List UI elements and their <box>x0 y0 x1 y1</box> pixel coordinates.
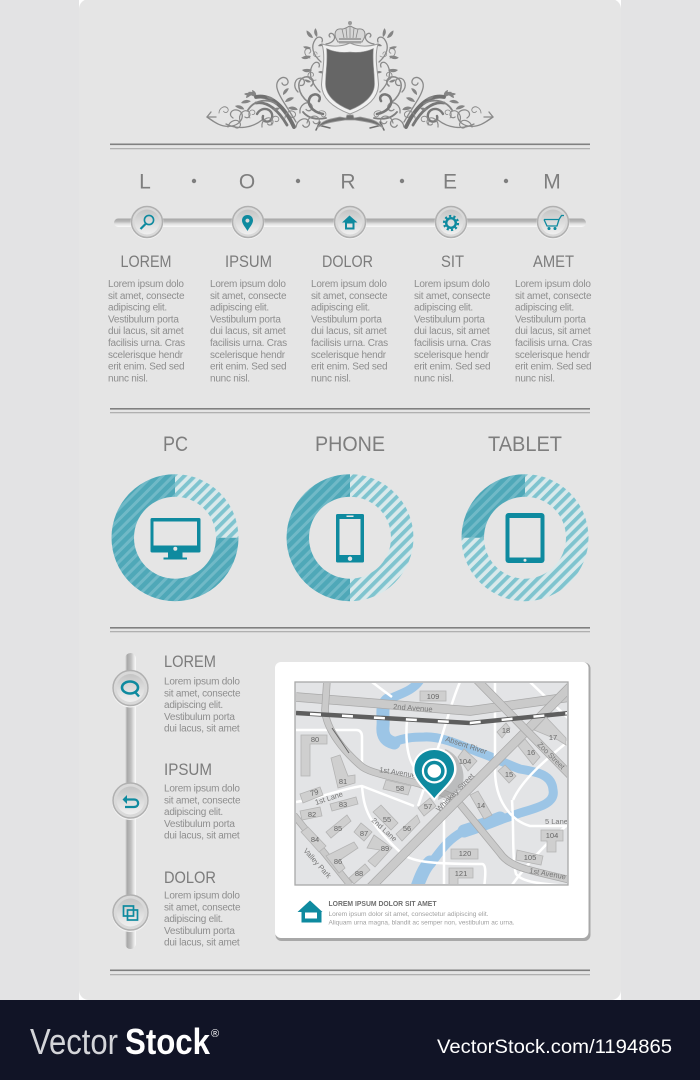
map card <box>275 662 590 941</box>
text column 3: nunc nisl. <box>311 373 351 384</box>
text column 2: Lorem ipsum dolo <box>210 279 286 290</box>
text column 4: Vestibulum porta <box>414 314 485 325</box>
donut chart: PC <box>111 474 238 601</box>
divider <box>110 144 590 149</box>
icon: pin <box>242 215 253 231</box>
column labels: SIT <box>441 253 464 271</box>
white streets <box>296 682 570 890</box>
text column 1: erit enim. Sed sed <box>108 362 184 373</box>
side item 2: dui lacus, sit amet <box>164 831 240 842</box>
donut chart: TABLET <box>462 474 588 601</box>
side item 3 <box>164 869 241 949</box>
side item 3: DOLOR <box>164 869 216 887</box>
map pin <box>412 748 464 801</box>
heading PC: PC <box>163 433 188 456</box>
button: layers <box>112 895 149 932</box>
side item 3: sit amet, consecte <box>164 902 241 913</box>
building numbers: 15 <box>505 770 513 779</box>
icon: magnifier <box>140 215 154 229</box>
text column 1: Vestibulum porta <box>108 314 179 325</box>
text column 1: nunc nisl. <box>108 373 148 384</box>
text column 4: nunc nisl. <box>414 373 454 384</box>
column labels: DOLOR <box>322 253 373 271</box>
street names: Valley Park <box>302 846 333 880</box>
building numbers: 57 <box>424 802 432 811</box>
text column 2: sit amet, consecte <box>210 291 287 302</box>
title letters L O R E M: L <box>139 170 151 194</box>
text column 2: scelerisque hendr <box>210 350 286 361</box>
street names: 1st Avenue <box>529 866 567 881</box>
text column 5: sit amet, consecte <box>515 291 592 302</box>
text column 2: erit enim. Sed sed <box>210 362 286 373</box>
building numbers: 105 <box>524 853 536 862</box>
text column 5: Vestibulum porta <box>515 314 586 325</box>
text column 1: facilisis urna. Cras <box>108 338 185 349</box>
street names: 5 Lane <box>545 817 568 826</box>
text column 4: sit amet, consecte <box>414 291 491 302</box>
building numbers: 79 <box>309 787 320 798</box>
vertical slider track <box>125 653 136 949</box>
building numbers: 14 <box>477 801 485 810</box>
icon: speech bubble <box>122 682 139 696</box>
side item 1 <box>164 653 241 735</box>
title letters L O R E M: M <box>543 170 561 194</box>
text column 3: adipiscing elit. <box>311 303 370 314</box>
footer url: VectorStock.com/1194865 <box>437 1036 672 1058</box>
side item 1: dui lacus, sit amet <box>164 724 240 735</box>
side item 2: adipiscing elit. <box>164 807 223 818</box>
building numbers: 121 <box>455 869 467 878</box>
street names: 1st Avenue <box>379 765 417 780</box>
side item 2: Lorem ipsum dolo <box>164 784 240 794</box>
icon: overlapping squares <box>124 906 138 920</box>
side item 3: Lorem ipsum dolo <box>164 890 240 902</box>
button: cart <box>536 206 570 239</box>
building numbers: 58 <box>396 784 404 793</box>
button: speech bubble <box>112 670 149 708</box>
text column 3: erit enim. Sed sed <box>311 362 387 373</box>
side item 3: dui lacus, sit amet <box>164 938 240 949</box>
text column 5: nunc nisl. <box>515 373 555 384</box>
legend text: Aliquam urna magna, blandit ac semper non, vestibulum ac urna. <box>328 920 515 926</box>
footer logo: Vector <box>30 1021 118 1062</box>
icon: back arrow <box>122 795 138 807</box>
button: gear <box>434 206 468 239</box>
building numbers: 84 <box>311 835 319 844</box>
column labels <box>120 253 574 271</box>
building numbers: 104 <box>459 757 471 766</box>
side item 3: Vestibulum porta <box>164 926 235 937</box>
button: search <box>130 206 164 239</box>
footer logo: Stock <box>125 1021 211 1062</box>
text column 4: dui lacus, sit amet <box>414 326 490 337</box>
white card corners behind panel <box>79 0 621 1000</box>
building numbers: 55 <box>383 815 391 824</box>
column labels: IPSUM <box>225 253 272 271</box>
side item 2: Vestibulum porta <box>164 819 235 830</box>
street names <box>302 702 568 881</box>
text column 1: scelerisque hendr <box>108 350 184 361</box>
text column 4: Lorem ipsum dolo <box>414 279 490 290</box>
icon: legend house <box>298 900 322 922</box>
heading PHONE: PHONE <box>315 433 385 456</box>
street names: 1st Lane <box>314 789 344 807</box>
text column 5: adipiscing elit. <box>515 303 574 314</box>
divider <box>110 408 590 413</box>
legend text: Lorem ipsum dolor sit amet, consectetur adipiscing elit. <box>328 911 489 918</box>
building numbers: 82 <box>308 810 316 819</box>
donut chart: PHONE <box>287 474 413 601</box>
icon: monitor <box>150 518 200 560</box>
shield <box>322 43 378 114</box>
building numbers: 89 <box>381 844 389 853</box>
title letters L O R E M <box>139 170 561 194</box>
horizontal slider track <box>114 218 586 227</box>
building numbers: 18 <box>502 726 510 735</box>
icon: phone <box>336 514 364 562</box>
side item 1: Vestibulum porta <box>164 712 235 723</box>
building numbers: 17 <box>549 733 557 742</box>
side item 1: Lorem ipsum dolo <box>164 676 240 688</box>
building numbers: 80 <box>311 735 319 744</box>
building numbers: 120 <box>459 849 471 858</box>
building numbers: 104 <box>546 831 558 840</box>
text column 4: scelerisque hendr <box>414 350 490 361</box>
title letters L O R E M: E <box>443 170 457 194</box>
side item 2: sit amet, consecte <box>164 795 241 806</box>
footer logo: ® <box>211 1028 219 1040</box>
side item 2 <box>164 761 241 842</box>
building numbers <box>308 692 558 878</box>
building numbers: 109 <box>427 692 439 701</box>
text column 2: dui lacus, sit amet <box>210 326 286 337</box>
ribbon <box>317 115 383 128</box>
building numbers: 56 <box>403 824 411 833</box>
divider <box>110 970 590 975</box>
text column 5: dui lacus, sit amet <box>515 326 591 337</box>
river <box>383 680 553 890</box>
street names: Whiskey Street <box>434 771 477 813</box>
side item 1: sit amet, consecte <box>164 688 241 699</box>
icon: cart <box>544 216 564 229</box>
text column 3: Lorem ipsum dolo <box>311 279 387 290</box>
street names: 2nd Lane <box>370 816 399 843</box>
text column 2: facilisis urna. Cras <box>210 338 287 349</box>
text column 1: Lorem ipsum dolo <box>108 279 184 290</box>
side item 3: adipiscing elit. <box>164 914 223 925</box>
railway <box>296 713 570 723</box>
street names: Zoo Street <box>536 740 567 772</box>
legend text: LOREM IPSUM DOLOR SIT AMET <box>328 901 437 908</box>
text column 3: facilisis urna. Cras <box>311 338 388 349</box>
buildings <box>300 691 566 890</box>
text column 4: erit enim. Sed sed <box>414 362 490 373</box>
direction arrow <box>332 728 349 753</box>
footer logo <box>30 1021 219 1062</box>
side item 1: LOREM <box>164 653 216 671</box>
map <box>294 680 575 890</box>
button: location pin <box>232 206 264 239</box>
text column 1: sit amet, consecte <box>108 291 185 302</box>
street names: 2nd Avenue <box>393 702 433 714</box>
roads <box>294 680 575 888</box>
text column 3: scelerisque hendr <box>311 350 387 361</box>
icon: house <box>342 216 358 230</box>
legend text <box>328 901 515 926</box>
building numbers: 87 <box>360 829 368 838</box>
button: back arrow <box>112 783 149 820</box>
building numbers: 16 <box>527 748 535 757</box>
text column 5: facilisis urna. Cras <box>515 338 592 349</box>
text column 5: erit enim. Sed sed <box>515 362 591 373</box>
building numbers: 83 <box>339 800 347 809</box>
icon: gear <box>444 216 458 230</box>
building numbers: 88 <box>355 869 363 878</box>
heading TABLET: TABLET <box>488 433 562 456</box>
side item 2: IPSUM <box>164 761 212 779</box>
text column 1: dui lacus, sit amet <box>108 326 184 337</box>
icon: tablet <box>506 513 544 563</box>
footer bar <box>0 1000 700 1080</box>
column labels: AMET <box>533 253 574 271</box>
text column 3: Vestibulum porta <box>311 314 382 325</box>
crest emblem <box>207 21 493 130</box>
building numbers: 86 <box>334 857 342 866</box>
building numbers: 81 <box>339 777 347 786</box>
crown <box>335 21 365 44</box>
button: home <box>334 206 366 239</box>
side item 1: adipiscing elit. <box>164 700 223 711</box>
text column 3: sit amet, consecte <box>311 291 388 302</box>
text column 3: dui lacus, sit amet <box>311 326 387 337</box>
text column 1: adipiscing elit. <box>108 303 167 314</box>
text column 2: nunc nisl. <box>210 373 250 384</box>
divider <box>110 627 590 632</box>
text column 5: Lorem ipsum dolo <box>515 279 591 290</box>
column labels: LOREM <box>120 253 172 271</box>
title letters L O R E M: R <box>340 170 356 194</box>
building numbers: 85 <box>334 824 342 833</box>
text column 2: adipiscing elit. <box>210 303 269 314</box>
text column 4: facilisis urna. Cras <box>414 338 491 349</box>
text column 2: Vestibulum porta <box>210 314 281 325</box>
street names: Absent River <box>444 734 488 756</box>
text column 4: adipiscing elit. <box>414 303 473 314</box>
text column 5: scelerisque hendr <box>515 350 591 361</box>
title letters L O R E M: O <box>239 170 255 194</box>
